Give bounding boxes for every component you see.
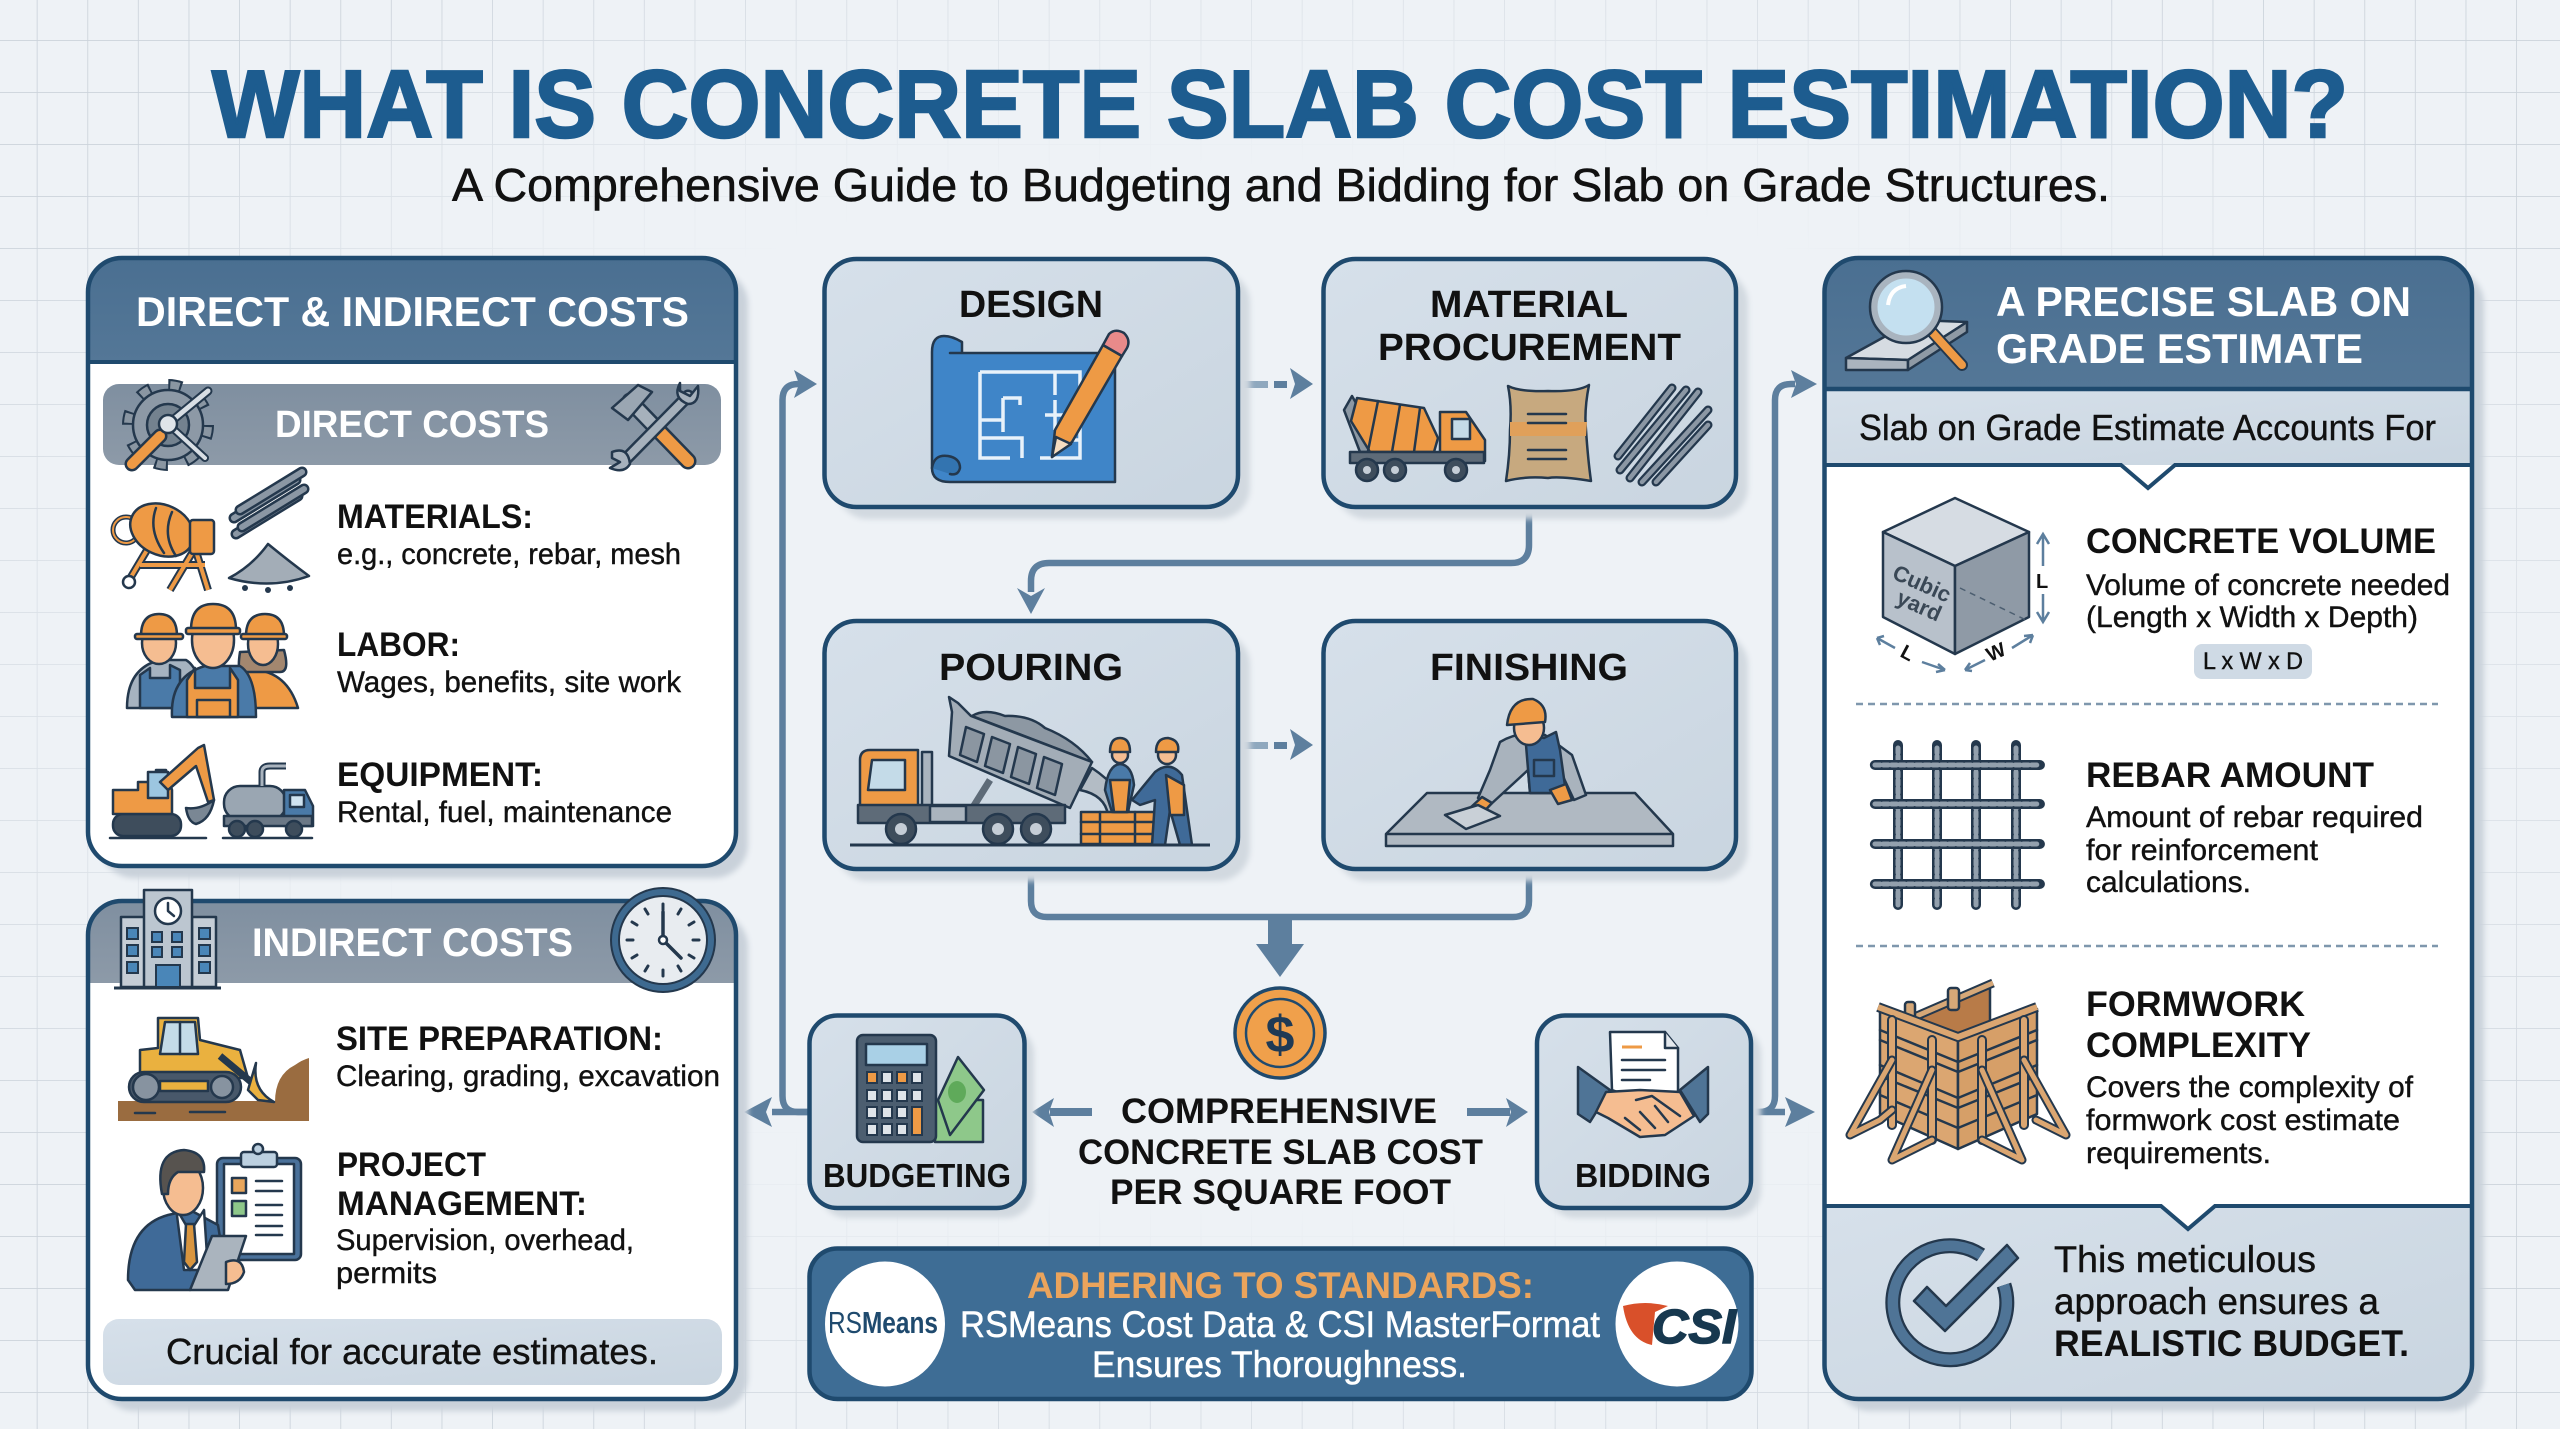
text: project management: PROJECT	[337, 1146, 486, 1184]
text: project management	[336, 1146, 634, 1290]
icon: cubic yard cube: W	[1983, 639, 2009, 667]
panel: direct and indirect costs	[88, 258, 748, 878]
icon: worker finishing slab	[1386, 699, 1673, 846]
box: bidding	[1537, 1016, 1761, 1218]
icon: cubic yard cube	[1877, 498, 2049, 672]
notch pointer: bottom	[1824, 1206, 2472, 1229]
text: labor	[337, 626, 682, 699]
icon: money	[935, 1057, 984, 1142]
icon: cubic yard cube: Cubic	[1889, 560, 1955, 607]
heading: indirect costs: INDIRECT COSTS	[252, 921, 573, 965]
text: site preparation	[336, 1020, 720, 1093]
icon: check mark in ring	[1893, 1245, 2018, 1360]
heading: a precise slab on grade estimate	[1996, 278, 2411, 372]
icon: hammer and wrench	[610, 383, 698, 470]
logo: RSMeans: RSMeans	[828, 1305, 938, 1340]
icon: three workers	[127, 604, 298, 717]
logo: RSMeans	[825, 1262, 945, 1386]
text: formwork complexity: COMPLEXITY	[2086, 1026, 2311, 1065]
formula chip: L x W x D	[2203, 648, 2303, 675]
text: equipment	[337, 756, 672, 829]
box: design	[824, 259, 1250, 519]
text: comprehensive concrete slab cost per square foot: PER SQUARE FOOT	[1110, 1173, 1451, 1212]
text: formwork complexity: formwork cost estimate	[2086, 1104, 2400, 1137]
text: concrete volume: Volume of concrete needed	[2086, 569, 2450, 602]
panel: precise slab on grade estimate	[1824, 258, 2484, 1411]
icon: tanker truck	[223, 766, 313, 838]
text: equipment: EQUIPMENT:	[337, 756, 543, 794]
text: formwork complexity: Covers the complexity of	[2086, 1071, 2414, 1104]
heading: a precise slab on grade estimate: GRADE ESTIMATE	[1996, 325, 2363, 372]
text: rebar amount	[2086, 756, 2423, 899]
text: realistic budget	[2054, 1239, 2409, 1364]
text: formwork complexity	[2086, 985, 2414, 1170]
text: comprehensive concrete slab cost per square foot: COMPREHENSIVE	[1121, 1092, 1437, 1131]
flow connector arrows	[744, 368, 1817, 1127]
text: materials	[337, 498, 681, 571]
icon: excavator	[110, 745, 214, 838]
icon: timber formwork	[1850, 983, 2066, 1160]
icon: clock	[611, 888, 715, 992]
box: pouring	[824, 621, 1250, 881]
icon: cubic yard cube: yard	[1893, 585, 1946, 626]
text: concrete volume	[2086, 522, 2450, 634]
box: budgeting: BUDGETING	[823, 1157, 1011, 1194]
box: finishing	[1324, 621, 1748, 881]
icon: magnifier over slab	[1846, 271, 1967, 370]
text: equipment: Rental, fuel, maintenance	[337, 796, 672, 829]
text: realistic budget: This meticulous	[2054, 1239, 2316, 1280]
box: material procurement	[1324, 259, 1748, 519]
box: pouring: POURING	[939, 647, 1123, 689]
icon: concrete mixer truck	[1344, 396, 1485, 481]
band: direct costs: DIRECT COSTS	[275, 404, 549, 446]
icon: bulldozer	[118, 1018, 309, 1121]
callout: crucial for accurate estimates	[103, 1319, 722, 1385]
text: project management: Supervision, overhead,	[336, 1224, 634, 1257]
icon: cement mixer	[113, 493, 214, 590]
text: concrete volume: (Length x Width x Depth)	[2086, 601, 2418, 634]
text: concrete volume: CONCRETE VOLUME	[2086, 522, 2436, 561]
text: materials: e.g., concrete, rebar, mesh	[337, 538, 681, 571]
text: site preparation: Clearing, grading, excavation	[336, 1060, 720, 1093]
icon: rebar grid	[1875, 745, 2040, 905]
icon: gear and wrench	[129, 386, 208, 464]
icon: dollar coin	[1235, 988, 1325, 1078]
box: finishing: FINISHING	[1430, 647, 1628, 689]
banner: adhering to standards	[810, 1248, 1752, 1399]
text: comprehensive concrete slab cost per square foot	[1078, 1092, 1483, 1212]
banner: adhering to standards: RSMeans Cost Data & CSI MasterFormat	[960, 1304, 1601, 1345]
box: design: DESIGN	[959, 284, 1103, 326]
text: formwork complexity: requirements.	[2086, 1137, 2271, 1170]
text: project management: permits	[336, 1257, 437, 1290]
text: site preparation: SITE PREPARATION:	[336, 1020, 663, 1058]
title: WHAT IS CONCRETE SLAB COST ESTIMATION?	[212, 51, 2348, 158]
icon: contract and handshake	[1578, 1032, 1708, 1137]
icon: aggregate pile	[229, 544, 309, 593]
text: formwork complexity: FORMWORK	[2086, 985, 2305, 1024]
banner: adhering to standards: Ensures Thoroughness.	[1092, 1344, 1467, 1385]
heading: direct & indirect costs: DIRECT & INDIRECT COSTS	[136, 288, 689, 335]
box: budgeting	[810, 1016, 1034, 1218]
heading: a precise slab on grade estimate: A PRECISE SLAB ON	[1996, 278, 2411, 325]
formula chip	[2194, 644, 2312, 679]
callout: crucial for accurate estimates: Crucial for accurate estimates.	[166, 1331, 658, 1372]
text: realistic budget: approach ensures a	[2054, 1281, 2379, 1322]
icon: cubic yard cube: L	[1897, 641, 1918, 666]
text: labor: Wages, benefits, site work	[337, 666, 682, 699]
text: project management: MANAGEMENT:	[337, 1185, 587, 1223]
icon: dump truck pouring concrete with workers	[850, 697, 1210, 845]
subtitle: A Comprehensive Guide to Budgeting and Bidding for Slab on Grade Structures.	[452, 159, 2110, 211]
box: material procurement: PROCUREMENT	[1378, 327, 1681, 369]
icon: dollar coin: $	[1266, 1006, 1295, 1064]
box: material procurement: MATERIAL	[1430, 284, 1628, 326]
icon: office building	[114, 890, 221, 988]
icon: blueprint and pencil	[932, 331, 1128, 482]
icon: rebar stack	[234, 472, 304, 534]
text: realistic budget: REALISTIC BUDGET.	[2054, 1323, 2409, 1364]
text: rebar amount: calculations.	[2086, 866, 2251, 899]
text: rebar amount: REBAR AMOUNT	[2086, 756, 2374, 795]
text: materials: MATERIALS:	[337, 498, 533, 536]
banner: adhering to standards: ADHERING TO STANDARDS:	[1027, 1265, 1534, 1306]
icon: project manager with clipboard	[128, 1144, 301, 1290]
subheading: estimate accounts for: Slab on Grade Estimate Accounts For	[1859, 407, 2436, 448]
box: bidding: BIDDING	[1575, 1157, 1711, 1194]
logo: CSI: CSI	[1652, 1301, 1738, 1354]
text: labor: LABOR:	[337, 626, 460, 664]
panel: indirect costs	[88, 888, 748, 1411]
text: comprehensive concrete slab cost per square foot: CONCRETE SLAB COST	[1078, 1133, 1483, 1172]
icon: calculator	[857, 1035, 936, 1142]
text: rebar amount: Amount of rebar required	[2086, 801, 2423, 834]
icon: cubic yard cube: L	[2036, 571, 2048, 593]
text: rebar amount: for reinforcement	[2086, 834, 2319, 867]
band: direct costs	[103, 384, 721, 465]
notch pointer	[1824, 465, 2472, 488]
icon: cement bag	[1506, 385, 1591, 481]
icon: rebar bundle	[1618, 388, 1708, 482]
logo: CSI	[1616, 1262, 1738, 1386]
